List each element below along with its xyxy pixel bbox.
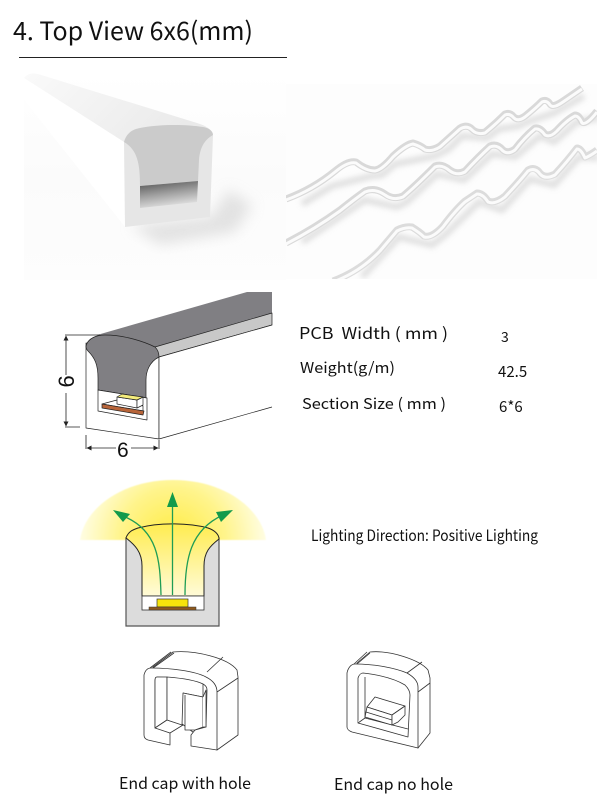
light glow (80, 480, 266, 540)
strip 1 (286, 88, 582, 200)
lens (126, 524, 219, 596)
lighting direction diagram (80, 480, 266, 626)
strip shadows (302, 96, 599, 277)
width label: 6 (117, 439, 129, 462)
dimension: height (65, 335, 100, 427)
pcb (149, 607, 196, 610)
led cavity (142, 596, 204, 610)
end cap with hole drawing (144, 652, 238, 750)
housing (126, 538, 219, 626)
caption: end cap no hole: End cap no hole (334, 771, 453, 795)
title: 4. Top View 6x6(mm) (13, 12, 253, 48)
photo: flexible bent strips (286, 84, 599, 282)
specification table: 6*6 (499, 396, 523, 417)
profile body (86, 292, 272, 439)
specification table (299, 320, 527, 417)
led chip (157, 599, 188, 607)
specification table: 42.5 (498, 361, 527, 382)
photo: neon tube profile (24, 73, 286, 280)
green arrows (113, 492, 233, 595)
strip 3 (333, 148, 597, 282)
technical drawing with 6x6 dimensions (54, 292, 272, 462)
spec: weight: Weight(g/m) (300, 357, 395, 378)
height label: 6 (54, 375, 79, 388)
title underline (19, 57, 287, 58)
spec: PCB width: PCB Width ( mm ) (299, 320, 448, 344)
specification table: 3 (501, 327, 509, 347)
spec: section size: Section Size ( mm ) (302, 393, 446, 414)
dimension: width (86, 435, 159, 449)
lighting direction caption: Lighting Direction: Positive Lighting (311, 524, 538, 546)
caption: end cap with hole: End cap with hole (119, 770, 251, 794)
end cap no hole drawing (347, 652, 430, 748)
strip 2 (286, 111, 597, 244)
